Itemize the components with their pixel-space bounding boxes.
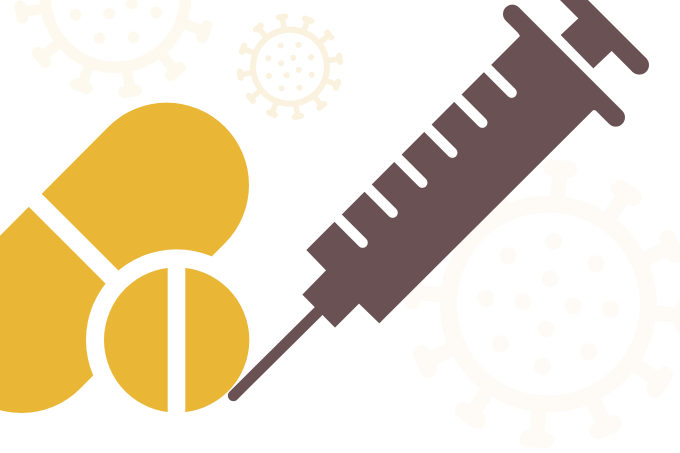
icon: large pale virus, top left xyxy=(0,0,233,115)
icon: capsule and tablet xyxy=(13,178,267,431)
barrel xyxy=(302,20,610,328)
icon: small cream virus xyxy=(228,4,352,129)
icon: large pale virus, bottom right xyxy=(412,168,680,440)
icon: syringe xyxy=(233,0,649,396)
needle xyxy=(233,312,318,396)
tablet xyxy=(86,249,267,431)
capsule xyxy=(13,178,167,331)
plunger xyxy=(560,0,649,75)
flange xyxy=(512,14,616,117)
graduation marks xyxy=(335,66,512,243)
